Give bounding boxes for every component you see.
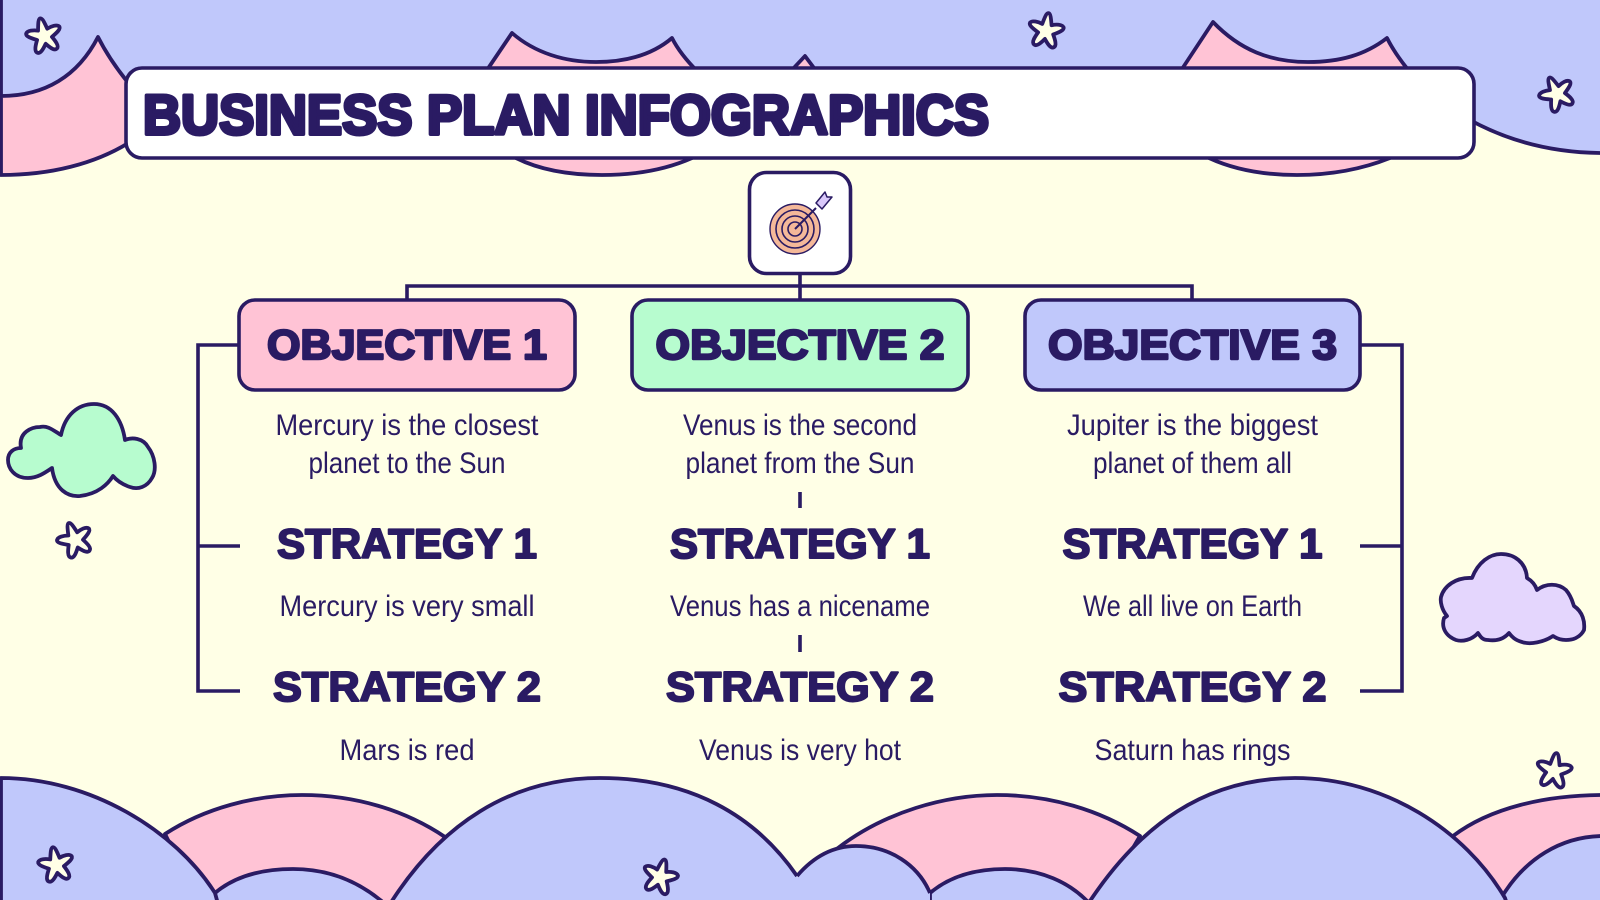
strategy 1 heading: STRATEGY 1: [1062, 520, 1322, 567]
objective 3 heading: OBJECTIVE 3: [1048, 321, 1337, 368]
star left: [53, 517, 96, 560]
pink arc middle: [838, 795, 1140, 900]
lavender cloud: [1441, 554, 1584, 643]
objective 1 box: [239, 300, 575, 390]
strategy 2 heading: STRATEGY 2: [666, 663, 934, 710]
top left pink hill: [1, 37, 130, 175]
strategy 2 text: Saturn has rings: [1094, 734, 1290, 767]
star bottom left: [36, 844, 76, 883]
blue hill small middle: [930, 869, 1090, 900]
objective 1 description: [276, 409, 539, 480]
strategy 2 heading: STRATEGY 2: [1058, 663, 1326, 710]
objective 2 description: planet from the Sun: [686, 447, 914, 480]
strategy 2 text: Venus is very hot: [699, 734, 902, 767]
pink arc right: [1453, 795, 1600, 900]
top right pink hill: [1180, 22, 1410, 175]
icon: target with arrow: [750, 172, 850, 274]
strategy 2 heading: STRATEGY 2: [273, 663, 541, 710]
strategy 1 heading: STRATEGY 1: [670, 520, 930, 567]
objective 3 description: [1067, 409, 1319, 480]
star right: [1535, 751, 1573, 789]
star top right: [1534, 70, 1579, 115]
panel: objective 1: [239, 300, 575, 767]
strategy 2 text: Mars is red: [340, 734, 474, 767]
star top left: [24, 15, 64, 55]
objective 2 heading: OBJECTIVE 2: [656, 321, 944, 368]
top sky band: [1, 0, 1600, 175]
strategy 1 text: Venus has a nicename: [670, 590, 930, 623]
bottom hills: [1, 778, 1600, 900]
panel: objective 2: [632, 300, 968, 767]
blue hill small corner: [1503, 836, 1600, 900]
star top middle: [1027, 11, 1065, 49]
blue hill low: [790, 846, 930, 900]
objective 2 description: Venus is the second: [683, 409, 917, 442]
objective 3 description: planet of them all: [1093, 447, 1292, 480]
strategy 1 text: We all live on Earth: [1083, 590, 1302, 623]
pink arc left: [165, 795, 445, 900]
strategy 1 heading: STRATEGY 1: [277, 520, 537, 567]
blue hill three: [1088, 778, 1507, 900]
blue hill two: [390, 778, 797, 900]
top centre pink hill: [487, 33, 698, 175]
panel: objective 3: [1025, 300, 1360, 767]
objective 2 box: [632, 300, 968, 390]
strategy 1 text: Mercury is very small: [280, 590, 534, 623]
blue hill small left: [215, 869, 385, 900]
objective 1 description: Mercury is the closest: [276, 409, 539, 442]
objective 3 box: [1025, 300, 1360, 390]
objective 3 description: Jupiter is the biggest: [1067, 409, 1319, 442]
star bottom middle: [639, 855, 681, 896]
green cloud: [8, 404, 155, 496]
title bar: [126, 68, 1474, 158]
connectors: [198, 274, 1402, 691]
objective 2 description: [683, 409, 917, 480]
objective 1 heading: OBJECTIVE 1: [267, 321, 547, 368]
small pink peak: [790, 56, 817, 72]
objective 1 description: planet to the Sun: [308, 447, 506, 480]
blue hill one: [1, 778, 218, 900]
title: BUSINESS PLAN INFOGRAPHICS: [143, 83, 989, 146]
